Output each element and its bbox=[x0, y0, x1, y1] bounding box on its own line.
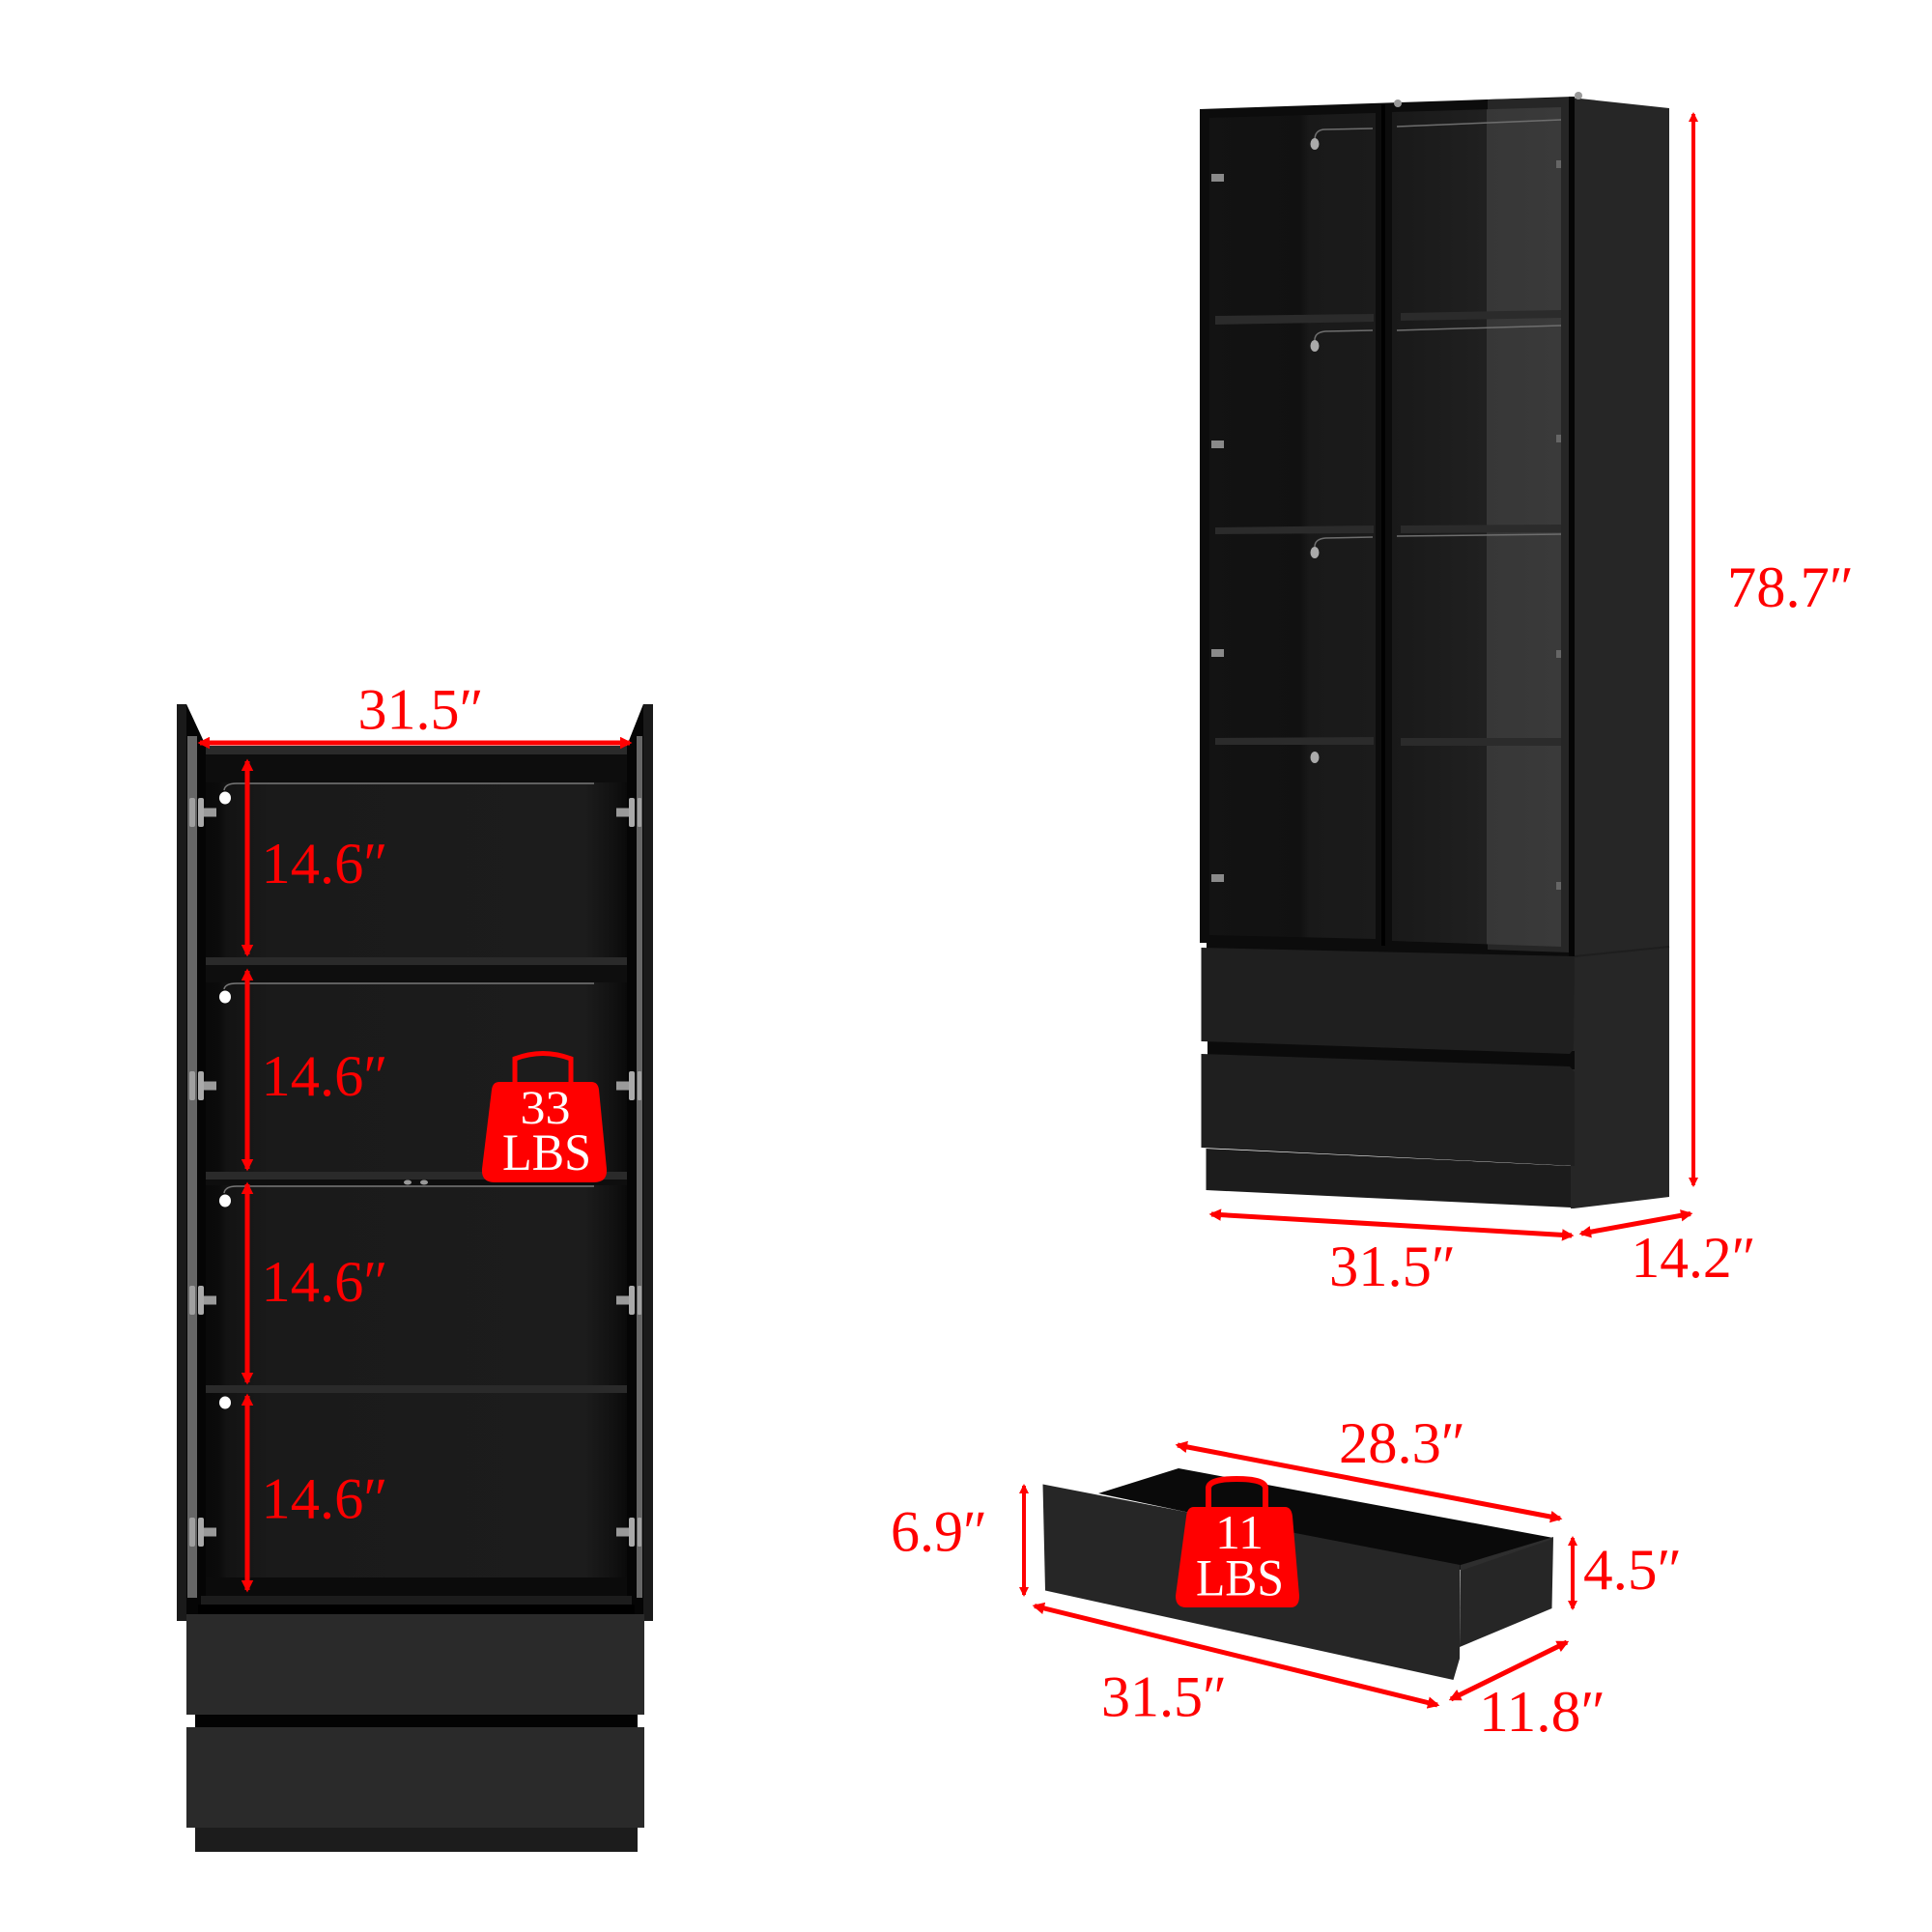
right glass pane bbox=[1392, 107, 1561, 947]
plinth base bbox=[195, 1828, 638, 1852]
label: 31.5 drawer: 31.5″ bbox=[1101, 1665, 1227, 1729]
shelf height arrow 1 bbox=[245, 761, 249, 954]
bag handle bbox=[515, 1053, 571, 1084]
bag body bbox=[1176, 1507, 1299, 1607]
left glass pane bbox=[1209, 113, 1376, 939]
side panel bbox=[1571, 98, 1669, 1208]
bag number: 33 bbox=[520, 1080, 570, 1134]
cabinet interior back panel bbox=[206, 746, 627, 1596]
width arrow top bbox=[200, 740, 630, 746]
drawer back length arrow bbox=[1178, 1445, 1560, 1519]
drawer gap bbox=[195, 1715, 638, 1727]
closed cabinet plinth bbox=[1206, 1149, 1571, 1208]
label: 4.5: 4.5″ bbox=[1583, 1538, 1682, 1602]
weight badge 11 LBS bbox=[1176, 1479, 1299, 1607]
bag unit: LBS bbox=[1196, 1549, 1284, 1607]
width arrow bottom bbox=[1211, 1214, 1572, 1236]
shelf height arrow 2 bbox=[245, 971, 249, 1169]
closed cabinet perspective view bbox=[1200, 92, 1669, 1208]
LED strips bbox=[224, 783, 594, 1193]
drawer front length arrow bbox=[1035, 1605, 1437, 1705]
gap between drawers bbox=[1208, 1038, 1575, 1069]
label: shelf height 1: 14.6″ bbox=[261, 832, 388, 895]
glass shelves bbox=[1215, 310, 1561, 746]
open drawer bbox=[1043, 1468, 1553, 1680]
drawer rim bbox=[1461, 1537, 1553, 1571]
label: shelf height 4: 14.6″ bbox=[261, 1466, 388, 1530]
weight badge 33 LBS bbox=[482, 1053, 607, 1182]
bag handle bbox=[1208, 1479, 1265, 1509]
drawer front height arrow bbox=[1022, 1486, 1026, 1595]
bag unit: LBS bbox=[502, 1123, 591, 1181]
LED dots behind glass bbox=[1310, 138, 1320, 763]
lower drawer bbox=[186, 1727, 644, 1828]
label: 6.9: 6.9″ bbox=[891, 1499, 987, 1563]
LED light dots bbox=[219, 792, 231, 1408]
drawer depth arrow bbox=[1451, 1642, 1567, 1699]
height arrow bbox=[1691, 114, 1695, 1185]
right open door bbox=[627, 704, 653, 1621]
cabinet floor bbox=[198, 1577, 635, 1614]
label: width 31.5 bottom: 31.5″ bbox=[1329, 1235, 1456, 1298]
LED strips behind glass bbox=[1315, 120, 1561, 547]
label: 28.3: 28.3″ bbox=[1339, 1411, 1465, 1475]
drawer front panel bbox=[1043, 1484, 1461, 1680]
label: shelf height 2: 14.6″ bbox=[261, 1044, 388, 1108]
left open door bbox=[177, 704, 206, 1621]
door centre divider bbox=[1381, 104, 1385, 946]
label: shelf height 3: 14.6″ bbox=[261, 1250, 388, 1314]
bag number: 11 bbox=[1215, 1505, 1264, 1559]
drawer side panel bbox=[1460, 1538, 1553, 1647]
shelf height arrow 4 bbox=[245, 1396, 249, 1590]
open cabinet front view bbox=[177, 704, 653, 1852]
shelf height arrow 3 bbox=[245, 1184, 249, 1382]
top panel edge bbox=[206, 746, 627, 754]
door frames bbox=[1200, 97, 1575, 957]
label: 11.8: 11.8″ bbox=[1479, 1680, 1605, 1744]
door right edge bbox=[1569, 97, 1575, 956]
label: height 78.7: 78.7″ bbox=[1727, 555, 1854, 619]
side panel seam bbox=[1575, 947, 1669, 956]
top pins bbox=[1394, 92, 1582, 107]
hinge plates bbox=[1211, 160, 1561, 890]
highlight on right door frame bbox=[1488, 98, 1569, 952]
lower closed drawer bbox=[1202, 1054, 1575, 1166]
door hinges left bbox=[189, 798, 216, 1547]
shelf bracket clips bbox=[404, 1180, 428, 1184]
drawer interior bbox=[1098, 1468, 1553, 1570]
shelves bbox=[206, 957, 627, 1393]
label: width 31.5: 31.5″ bbox=[357, 678, 483, 742]
upper closed drawer bbox=[1202, 948, 1575, 1054]
door hinges right bbox=[616, 798, 641, 1547]
drawer side height arrow bbox=[1571, 1538, 1575, 1608]
bag body bbox=[482, 1082, 607, 1182]
depth arrow bbox=[1581, 1213, 1690, 1234]
upper drawer bbox=[186, 1614, 644, 1715]
label: depth 14.2: 14.2″ bbox=[1631, 1226, 1756, 1290]
